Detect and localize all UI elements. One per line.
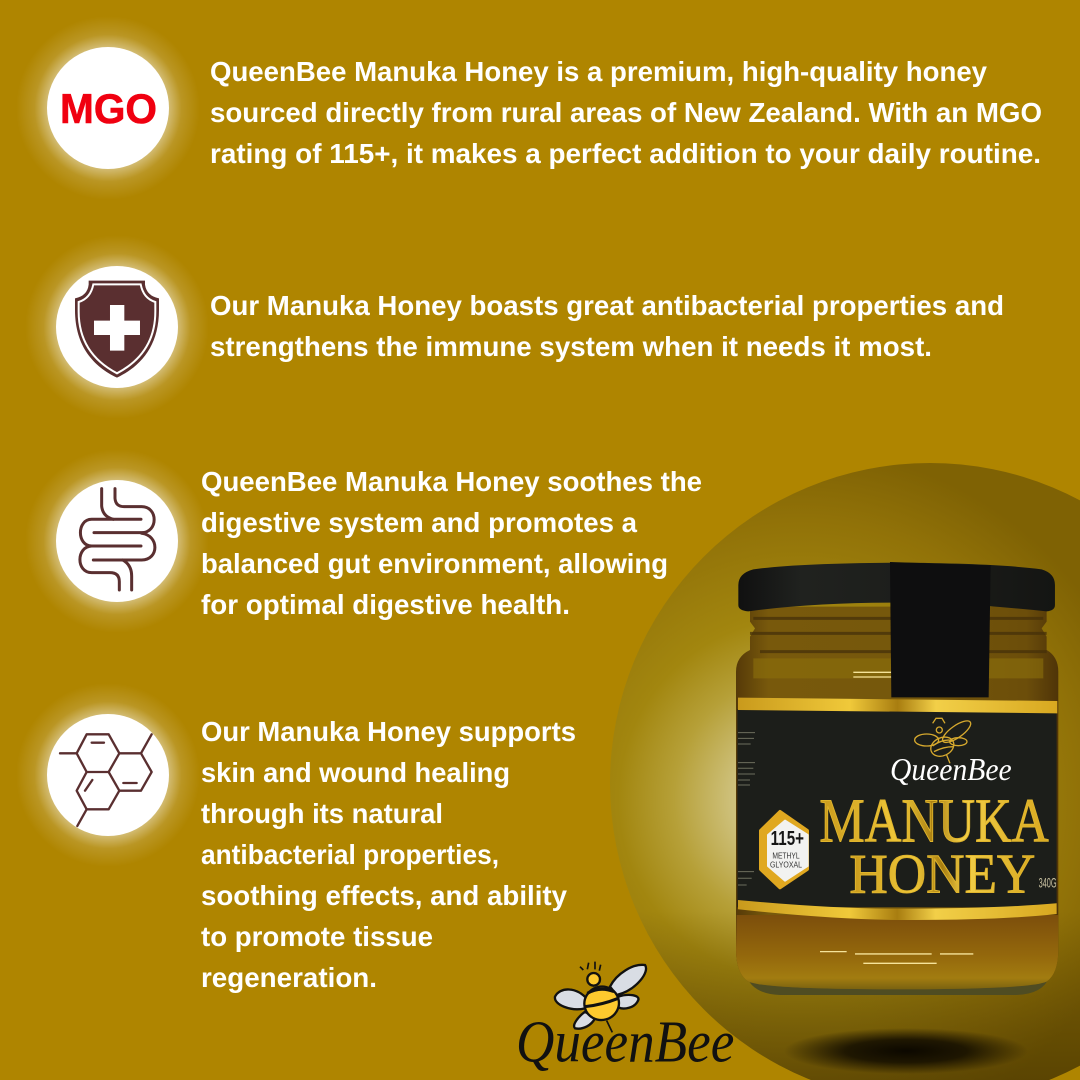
text block: antibacterial: strengthens the immune system when it needs it most. xyxy=(210,331,932,362)
gold band bottom xyxy=(738,900,1057,920)
text block: digestion: digestive system and promotes a xyxy=(201,507,637,538)
icon: intestines xyxy=(25,449,209,633)
icon: MGO badge: MGO xyxy=(60,85,157,132)
logo bee body xyxy=(580,962,623,1032)
jar glass base xyxy=(747,977,1049,995)
text block: skin healing: to promote tissue xyxy=(201,921,433,952)
honey highlights xyxy=(820,672,973,963)
text block: digestion xyxy=(201,466,702,620)
honey body xyxy=(736,607,1058,989)
honey jar xyxy=(736,562,1058,995)
QueenBee logo xyxy=(516,962,734,1075)
icon: molecule xyxy=(16,683,200,867)
text block: intro xyxy=(210,56,1042,169)
text block: digestion: for optimal digestive health. xyxy=(201,589,570,620)
text block: skin healing: regeneration. xyxy=(201,962,377,993)
label badge 115+: 115+ xyxy=(771,828,804,850)
text block: skin healing: antibacterial properties, xyxy=(201,839,499,870)
text block: intro: sourced directly from rural areas of New Zealand. With an MGO xyxy=(210,97,1042,128)
text block: antibacterial xyxy=(210,290,1004,362)
lid xyxy=(738,563,1055,611)
label badge 115+: GLYOXAL xyxy=(770,859,802,869)
text block: skin healing: skin and wound healing xyxy=(201,757,510,788)
label badge 115+: METHYL xyxy=(772,850,800,860)
text block: antibacterial: Our Manuka Honey boasts great antibacterial properties and xyxy=(210,290,1004,321)
label weight: 340G xyxy=(1039,874,1057,890)
jar shadow xyxy=(784,1028,1028,1074)
text block: digestion: QueenBee Manuka Honey soothes the xyxy=(201,466,702,497)
label wordmark: QueenBee xyxy=(890,751,1012,787)
logo wordmark: QueenBee xyxy=(516,1009,734,1075)
label logo bee xyxy=(915,717,974,763)
text block: skin healing: Our Manuka Honey supports xyxy=(201,716,576,747)
text block: intro: QueenBee Manuka Honey is a premium, high-quality honey xyxy=(210,56,987,87)
text block: intro: rating of 115+, it makes a perfect addition to your daily routine. xyxy=(210,138,1041,169)
text block: digestion: balanced gut environment, allowing xyxy=(201,548,668,579)
label HONEY: HONEY xyxy=(849,844,1035,906)
text block: skin healing xyxy=(201,716,576,993)
label xyxy=(737,709,1057,907)
text block: skin healing: soothing effects, and ability xyxy=(201,880,567,911)
neck shading xyxy=(750,618,1047,652)
icon: MGO badge xyxy=(16,16,200,200)
logo bee wings xyxy=(555,965,646,1029)
lower honey xyxy=(736,915,1058,989)
icon: shield with cross xyxy=(25,235,209,419)
text block: skin healing: through its natural xyxy=(201,798,443,829)
spotlight circle behind jar xyxy=(610,463,1080,1080)
label badge 115+ xyxy=(761,812,808,888)
black tape xyxy=(890,562,991,697)
gold band top xyxy=(738,698,1057,713)
honey lighter band xyxy=(753,658,1043,678)
label small print xyxy=(738,733,755,885)
